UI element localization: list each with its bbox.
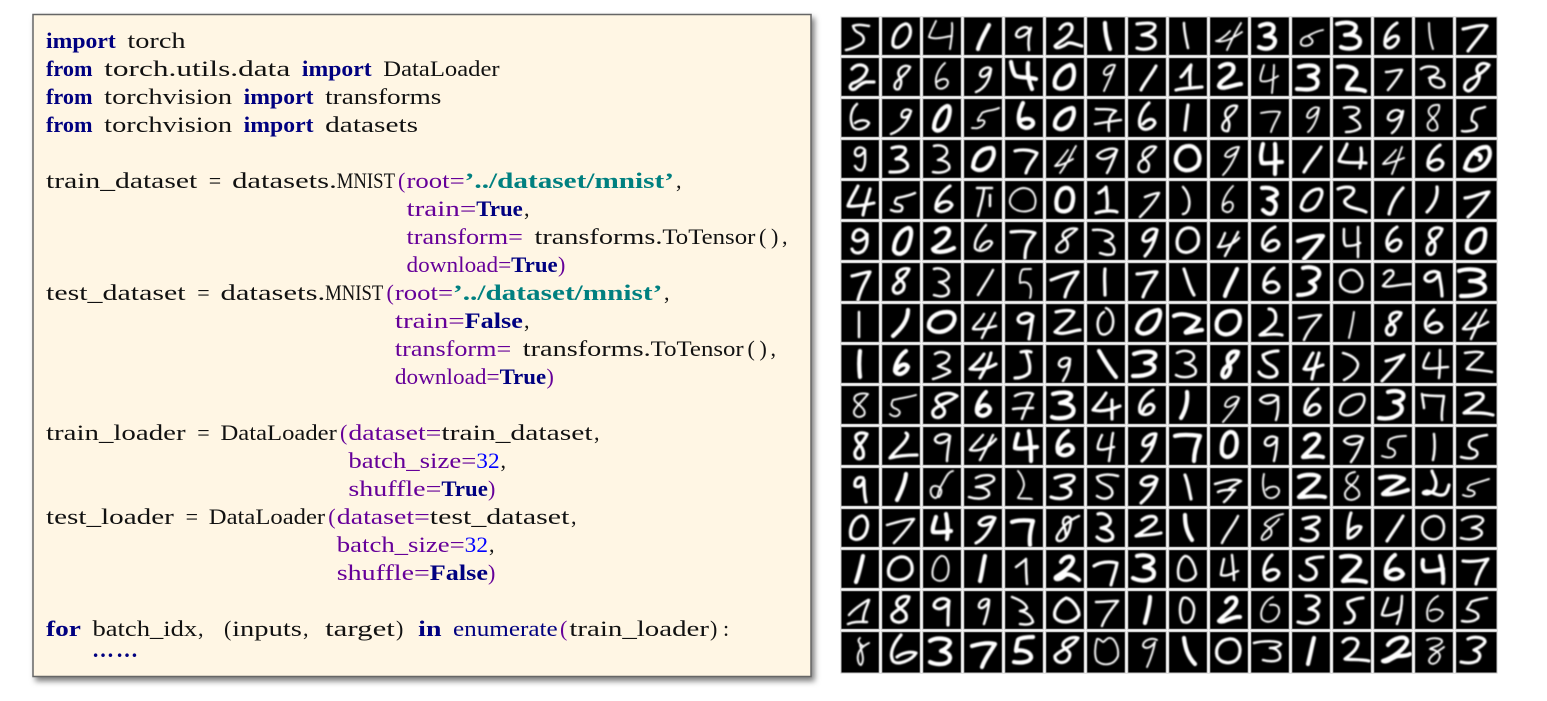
code: test_dataset: transforms.	[523, 336, 651, 361]
code: test_dataset: test_dataset	[46, 280, 186, 305]
code: test_loader: batch_size=	[337, 532, 465, 557]
code: test_loader: 32	[465, 532, 488, 557]
code: imports: torch.utils.data	[104, 56, 291, 81]
digit row 10	[854, 389, 1493, 422]
code: test_dataset: ,	[664, 280, 670, 305]
code: test_dataset: transform=	[395, 336, 511, 361]
code: train_loader: shuffle=	[348, 476, 441, 501]
code: training loop: for	[46, 616, 81, 641]
code: training loop: ……	[92, 637, 138, 662]
code: train_dataset: ,	[524, 196, 530, 221]
code: train_dataset: ’../dataset/mnist’	[465, 168, 674, 193]
digit row 16	[858, 635, 1485, 667]
code: train_dataset: download=	[406, 252, 511, 277]
code: test_loader	[46, 504, 576, 585]
code: train_dataset: ToTensor	[662, 224, 756, 249]
code: test_loader: =	[186, 504, 198, 529]
digit row 15	[848, 596, 1487, 626]
code: train_dataset: =	[209, 168, 221, 193]
code: train_dataset: train_dataset	[46, 168, 197, 193]
code: train_loader: (	[340, 420, 347, 445]
code: test_loader: DataLoader	[209, 504, 326, 529]
code: training loop: target	[325, 616, 395, 641]
digit row 4	[855, 144, 1490, 175]
code: training loop: ,	[198, 616, 204, 641]
code: test_dataset: )	[546, 364, 554, 389]
code: imports: DataLoader	[383, 56, 500, 81]
digit row 14	[856, 555, 1488, 585]
code: imports: import	[244, 84, 314, 109]
code: training loop: )	[396, 616, 403, 641]
code: training loop	[46, 616, 729, 662]
chart: MNIST handwritten digit grid	[841, 17, 1497, 673]
code: train_dataset: )	[558, 252, 565, 277]
code: imports: from	[46, 56, 92, 81]
code: train_loader: 32	[476, 448, 500, 473]
code: test_dataset: ,	[524, 308, 530, 333]
code: train_loader: True	[441, 476, 488, 501]
code: test_dataset: )	[760, 336, 767, 361]
digit row 11	[855, 431, 1487, 462]
code: training loop: )	[710, 616, 717, 641]
digit row 13	[850, 513, 1483, 545]
code: train_loader: DataLoader	[220, 420, 338, 445]
digit row 9	[859, 350, 1492, 381]
code: train_dataset: MNIST	[337, 168, 395, 193]
code: training loop: inputs	[232, 616, 302, 641]
code: test_loader: False	[430, 560, 488, 585]
code: test_dataset: datasets.	[220, 280, 325, 305]
digit row 8	[859, 308, 1488, 340]
code: imports: torchvision	[104, 112, 232, 137]
code: test_dataset: True	[500, 364, 546, 389]
code: test_dataset: (	[748, 336, 755, 361]
code: train_dataset: (	[759, 224, 766, 249]
code: training loop: :	[723, 616, 729, 641]
code: imports: import	[46, 28, 117, 53]
digit row 1	[846, 21, 1487, 51]
code: imports: from	[46, 112, 92, 137]
code: imports: datasets	[325, 112, 418, 137]
code: imports: transforms	[325, 84, 441, 109]
code: test_loader: )	[488, 560, 495, 585]
code: imports: import	[302, 56, 372, 81]
code: train_loader: train_dataset	[441, 420, 593, 445]
digit row 2	[850, 62, 1489, 93]
code: train_loader: batch_size=	[348, 448, 476, 473]
code: training loop: ,	[303, 616, 308, 641]
digit row 3	[851, 103, 1485, 134]
code: train_dataset: root=	[406, 168, 465, 193]
code: test_dataset: =	[197, 280, 210, 305]
code: train_dataset: ,	[782, 224, 788, 249]
code: train_dataset: datasets.	[232, 168, 337, 193]
code: test_dataset: ’../dataset/mnist’	[453, 280, 662, 305]
code: train_loader: ,	[594, 420, 600, 445]
code: test_loader: (	[328, 504, 336, 529]
code: test_loader: test_dataset	[430, 504, 569, 529]
code: imports	[46, 28, 500, 137]
code: imports: from	[46, 84, 92, 109]
code: training loop: (	[224, 616, 231, 641]
code: test_loader: ,	[571, 504, 576, 529]
code: train_dataset: transforms.	[534, 224, 662, 249]
code: train_dataset: train=	[406, 196, 476, 221]
code: test_loader: shuffle=	[337, 560, 430, 585]
code: test_dataset: ,	[770, 336, 776, 361]
code: train_loader: dataset=	[348, 420, 441, 445]
code: test_dataset: train=	[395, 308, 465, 333]
digit row 6	[852, 225, 1485, 259]
digit row 5	[848, 186, 1489, 217]
code: test_loader: test_loader	[46, 504, 175, 529]
code: train_dataset: True	[511, 252, 558, 277]
code: train_loader: train_loader	[46, 420, 186, 445]
code: train_dataset	[46, 168, 788, 277]
code: imports: torch	[127, 28, 186, 53]
code: train_loader: =	[197, 420, 210, 445]
code: train_loader	[46, 420, 600, 501]
code: test_dataset: (	[386, 280, 394, 305]
digit row 12	[855, 471, 1489, 503]
code: test_dataset: False	[465, 308, 523, 333]
code: imports: torchvision	[104, 84, 232, 109]
code: imports: import	[244, 112, 314, 137]
panel: code listing	[33, 14, 811, 676]
code: train_loader: ,	[500, 448, 506, 473]
code: training loop: (	[560, 616, 567, 641]
code: test_dataset	[46, 280, 776, 389]
code: train_dataset: transform=	[406, 224, 523, 249]
code: training loop: in	[418, 616, 442, 641]
code: train_dataset: (	[398, 168, 405, 193]
code: train_dataset: ,	[676, 168, 682, 193]
code: train_loader: )	[488, 476, 495, 501]
code: test_dataset: download=	[395, 364, 500, 389]
code: training loop: train_loader	[569, 616, 710, 641]
code: train_dataset: )	[771, 224, 778, 249]
code: test_dataset: MNIST	[325, 280, 384, 305]
code: test_dataset: root=	[395, 280, 453, 305]
code: test_loader: ,	[489, 532, 494, 557]
code: test_dataset: ToTensor	[651, 336, 744, 361]
code: training loop: batch_idx	[92, 616, 197, 641]
code: training loop: enumerate	[453, 616, 558, 641]
code: test_loader: dataset=	[337, 504, 430, 529]
code: train_dataset: True	[476, 196, 523, 221]
digit row 7	[852, 267, 1485, 300]
